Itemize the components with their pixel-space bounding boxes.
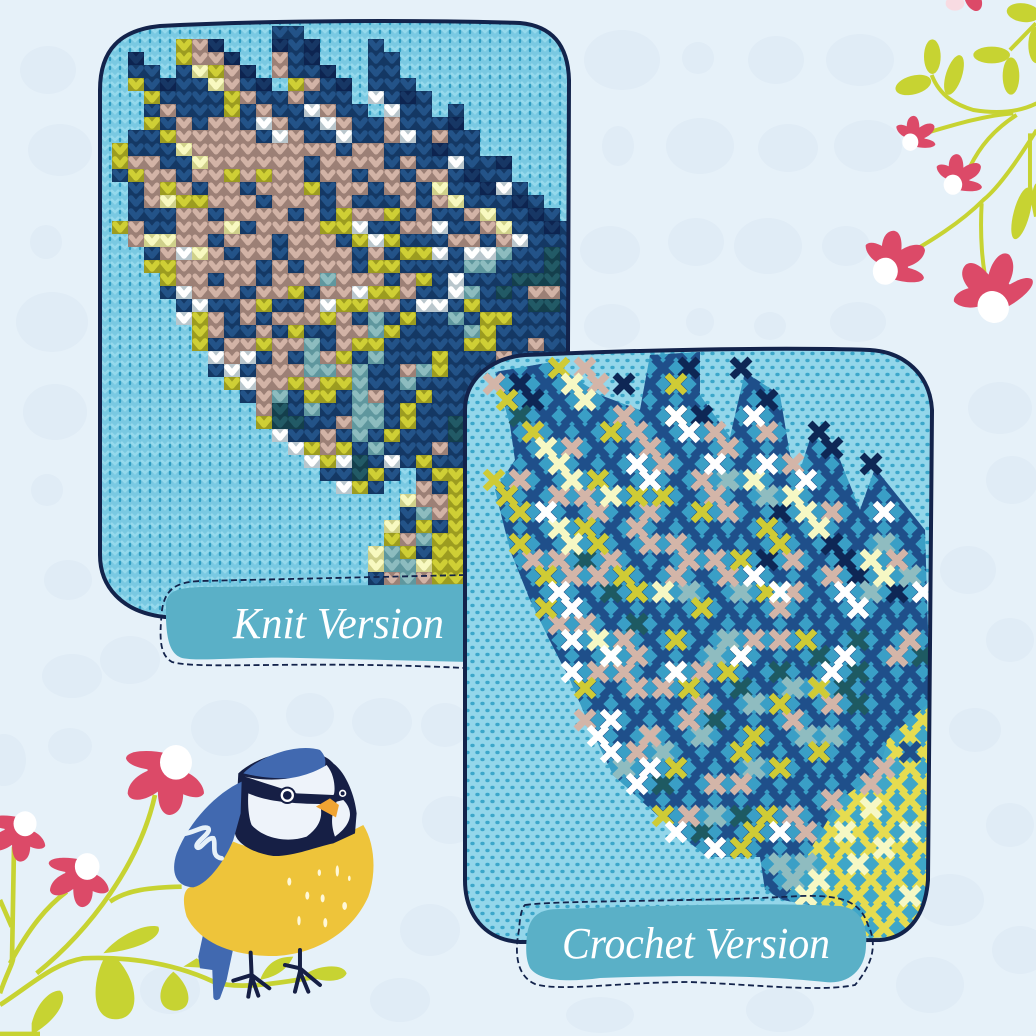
floral branch: top right xyxy=(862,0,1036,337)
knit wing base xyxy=(112,26,568,588)
bird legs xyxy=(233,950,320,997)
icon: blue tit bird xyxy=(174,748,374,1000)
crochet wing underlay xyxy=(495,352,930,930)
yellow stitches xyxy=(112,39,512,588)
sage crosses xyxy=(615,471,919,889)
bird chest flecks xyxy=(287,865,351,927)
bird eyes xyxy=(279,787,348,804)
panel: knit swatch xyxy=(98,18,572,622)
white stitches xyxy=(176,91,528,494)
bird beak xyxy=(316,798,339,817)
pale yellow stitches xyxy=(144,65,512,572)
crochet swatch outline xyxy=(465,349,932,942)
bird cap xyxy=(243,748,325,778)
taupe crosses xyxy=(485,359,919,841)
label: knit version: Knit Version xyxy=(232,599,444,648)
crochet tail yellow xyxy=(790,700,932,938)
navy cross inside yellow tail xyxy=(901,743,919,761)
taupe stitches xyxy=(128,39,560,588)
panel: crochet swatch xyxy=(460,345,936,945)
bird wing xyxy=(174,782,242,887)
yellow crosses xyxy=(485,359,828,857)
bird tail xyxy=(198,933,233,1000)
darkest navy stitches xyxy=(128,39,560,234)
label: crochet version: Crochet Version xyxy=(562,919,830,968)
knit swatch outline xyxy=(100,21,569,620)
teal crosses xyxy=(511,407,932,841)
floral branch: bottom left xyxy=(0,745,347,1036)
bird body xyxy=(184,825,374,956)
label: knit version xyxy=(161,575,470,668)
label: crochet version xyxy=(517,896,873,988)
bird face xyxy=(245,765,350,840)
pale crosses xyxy=(537,375,919,905)
white crosses xyxy=(537,407,932,857)
bird collar xyxy=(235,751,357,856)
crochet navy cross stitches xyxy=(495,352,930,930)
deep teal stitches xyxy=(240,247,560,481)
sage stitches xyxy=(272,247,512,585)
darkest crosses xyxy=(511,359,906,601)
